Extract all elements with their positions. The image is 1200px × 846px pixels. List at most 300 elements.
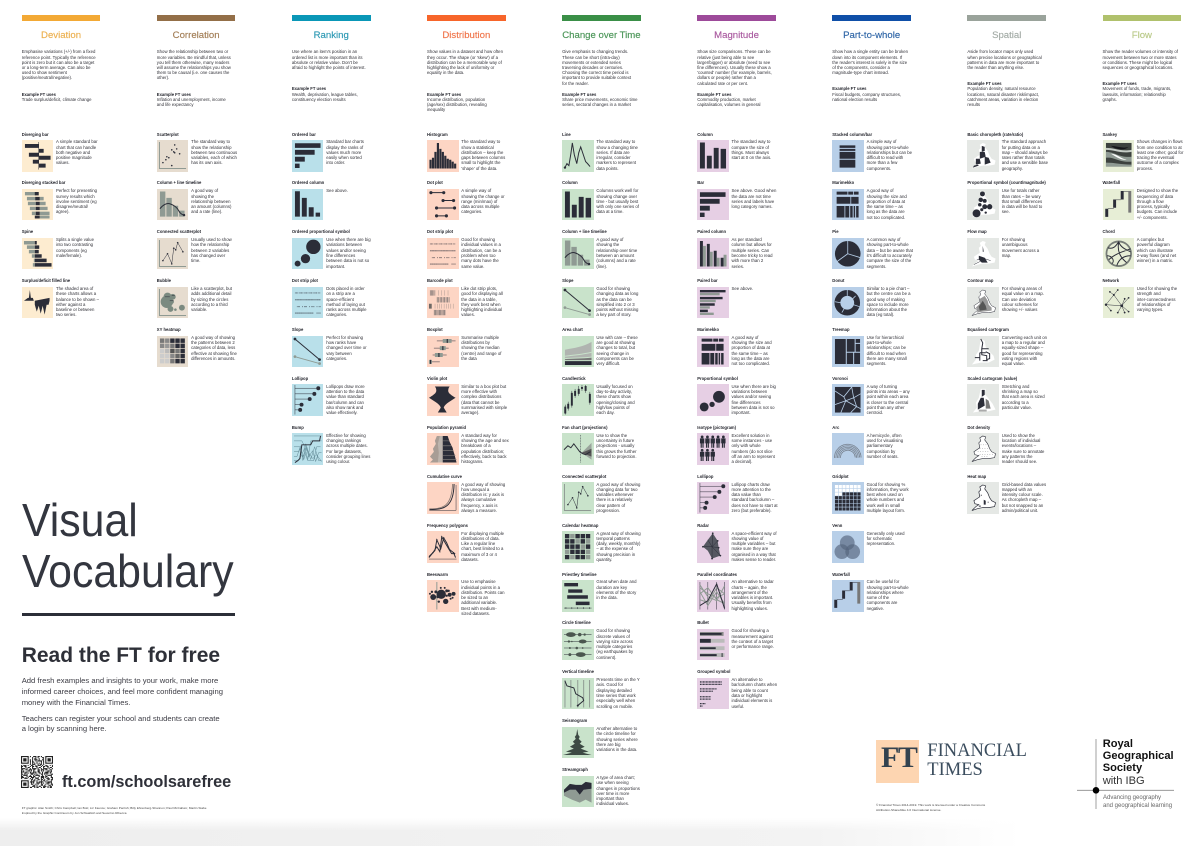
description: using colour. xyxy=(326,459,350,464)
description: Lollipop charts draw xyxy=(731,482,770,487)
intro text: larger/bigger) or absolute (need to see xyxy=(697,60,770,65)
description: outcome of a complex xyxy=(1137,160,1179,165)
description: Use to emphasise xyxy=(461,579,496,584)
description: axis. Good for xyxy=(596,682,623,687)
description: any patterns the xyxy=(1002,454,1033,459)
description: either against a xyxy=(56,302,85,307)
card: Treemap xyxy=(832,327,960,376)
description xyxy=(1137,286,1177,312)
description: map – should always be xyxy=(1002,150,1048,155)
description xyxy=(461,482,505,513)
description: between an amount xyxy=(596,253,634,258)
description: quantity. xyxy=(596,557,612,562)
example uses: Share price movements, economic time xyxy=(562,97,638,102)
card: Isotype (pictogram) xyxy=(697,425,825,474)
description xyxy=(191,286,232,312)
icon: sankey xyxy=(1102,140,1134,172)
description: into two contrasting xyxy=(56,242,93,247)
icon: calendar heatmap xyxy=(562,531,594,563)
example uses: and life expectancy xyxy=(157,102,194,107)
card: Connected scatterplot: Connected scatterplot xyxy=(562,474,606,479)
description: are good at showing xyxy=(596,340,635,345)
description: charts – again, the xyxy=(731,585,767,590)
card: Chord: Chord xyxy=(1102,229,1115,234)
card: Area chart: Area chart xyxy=(562,327,583,332)
description: variables, each of which xyxy=(191,155,237,160)
icon: vertical timeline xyxy=(562,678,594,709)
description xyxy=(461,286,503,318)
description: Good for showing a xyxy=(731,628,769,633)
description xyxy=(867,433,903,459)
description: bar/column and can xyxy=(326,400,364,405)
card: Seismogram xyxy=(562,718,690,767)
heading: Correlation: Correlation xyxy=(173,30,220,40)
description: be sized to an xyxy=(461,595,488,600)
card: Venn xyxy=(832,523,960,572)
description: Use with care – these xyxy=(596,335,638,340)
card: Cumulative curve xyxy=(427,474,555,523)
description: a map to a regular and xyxy=(1002,340,1045,345)
icon: parallel coordinates xyxy=(697,580,729,612)
intro text: ordered list is more important than its xyxy=(292,55,363,60)
copyright: Attribution-ShareAlike 4.0 International License. xyxy=(876,808,941,812)
card: Column xyxy=(697,132,825,180)
description: (centre) and range of xyxy=(461,351,501,356)
description: components. xyxy=(867,166,891,171)
description: column but allows for xyxy=(731,242,772,247)
card: Barcode plot xyxy=(427,278,555,327)
description: the circle timeline for xyxy=(596,731,636,736)
icon: diverging bar xyxy=(22,140,53,172)
description: Like a regular line xyxy=(461,541,495,546)
promo text: informed career choices, and feel more confident managing xyxy=(22,687,223,696)
icon: voronoi xyxy=(832,384,864,416)
copyright: © Financial Times 2014-2019. This work is licensed under a Creative Commons xyxy=(876,802,985,806)
description xyxy=(731,628,774,649)
intro text: will assume the relationships you show xyxy=(157,65,231,70)
description: and use a sensible base xyxy=(1002,160,1048,165)
description: uncertainty in future xyxy=(596,438,634,443)
description xyxy=(326,384,365,415)
column: Deviation xyxy=(22,15,100,318)
icon: chord xyxy=(1102,238,1134,269)
example uses xyxy=(967,81,1039,107)
description: the context of a target xyxy=(731,639,773,644)
colour bar xyxy=(427,15,506,21)
description: value than standard xyxy=(326,394,364,399)
description: showing part-to-whole xyxy=(867,145,909,150)
description: showing part-to-whole xyxy=(867,242,909,247)
intro text: Show the reader volumes or intensity of xyxy=(1102,49,1178,54)
intro text xyxy=(427,49,503,75)
description: The standard way to xyxy=(731,139,770,144)
description: part-to-whole xyxy=(867,340,892,345)
description: also show rank and xyxy=(326,405,363,410)
colour bar xyxy=(562,15,641,21)
card: Stacked column/bar xyxy=(832,132,960,180)
intro text: calculated rate or per cent. xyxy=(697,81,748,86)
icon: lollipop xyxy=(697,482,729,514)
description: A simple standard bar xyxy=(56,139,98,144)
example uses: inequality xyxy=(427,107,445,112)
description: same value. xyxy=(461,264,484,268)
chart list xyxy=(1102,132,1200,327)
card: Voronoi xyxy=(832,376,960,425)
description: more effective with xyxy=(461,389,497,394)
description: segments. xyxy=(867,361,886,366)
description: The standard way to xyxy=(596,139,635,144)
description: which can illustrate xyxy=(1137,248,1173,253)
description: parliamentary xyxy=(867,443,893,448)
description xyxy=(1002,139,1048,171)
card: Donut xyxy=(832,278,960,327)
description: categories. xyxy=(326,312,347,317)
description xyxy=(1002,335,1047,367)
description: Effective for showing xyxy=(326,433,366,438)
description: events/locations – xyxy=(1002,443,1036,448)
description: important than xyxy=(596,796,624,801)
card: Spine xyxy=(22,229,94,269)
description: mapped with an xyxy=(1002,487,1032,492)
description: that small differences xyxy=(1002,199,1042,204)
description: forward to projection. xyxy=(596,454,637,459)
example uses: Example FT uses xyxy=(427,92,461,97)
description: shrinking a map so xyxy=(1002,389,1038,394)
description: many dots have the xyxy=(461,258,499,263)
card: Population pyramid xyxy=(427,425,555,474)
card: Heat map xyxy=(967,474,1095,523)
icon: treemap xyxy=(832,336,864,367)
description xyxy=(56,188,97,214)
description xyxy=(731,139,771,160)
card: Boxplot xyxy=(427,327,555,376)
description: changes in proportions xyxy=(596,786,640,790)
description: bar/column charts when xyxy=(731,682,777,687)
description: A great way of showing xyxy=(596,531,641,536)
column: Magnitude xyxy=(697,0,825,720)
description: Summarise multiple xyxy=(461,335,499,340)
example uses: (age/sex) distribution, revealing xyxy=(427,102,487,107)
description xyxy=(56,237,94,258)
description: changed over time or xyxy=(326,345,367,350)
intro text: point is zero but it can also be a target xyxy=(22,60,94,65)
description xyxy=(461,579,505,616)
description: between data is not so xyxy=(731,405,774,410)
credits: FT graphic: Alan Smith; Chris Campbell; Ian Bott; Liz Faunce; Graham Parrish; Billy Ehrenberg-Shannon; Paul McCallum; Martin Stabe xyxy=(22,806,206,810)
description: distribution. Points can xyxy=(461,590,505,595)
description: points into areas – any xyxy=(867,389,910,394)
description: adds additional detail xyxy=(191,291,231,296)
intro text xyxy=(1102,49,1178,70)
description xyxy=(1137,237,1176,264)
description xyxy=(731,579,774,611)
description: variations between xyxy=(731,389,767,394)
card: Dot plot xyxy=(427,180,555,229)
icon: Priestley timeline xyxy=(562,580,594,612)
chart list xyxy=(967,132,1095,523)
description: information, they work xyxy=(867,487,909,492)
description: method of laying out xyxy=(326,302,365,307)
description: from one condition to at xyxy=(1137,145,1182,150)
promo text: money with the Financial Times. xyxy=(22,698,130,707)
description: in data will be hard to xyxy=(1002,204,1042,209)
description: how the relationship xyxy=(191,242,229,247)
description: values much more xyxy=(326,150,361,155)
wordmark xyxy=(927,742,1027,780)
description: See above. xyxy=(326,188,348,193)
card: Paired bar: Paired bar xyxy=(697,278,718,283)
description: relationship between xyxy=(191,199,231,204)
description: A type of area chart; xyxy=(596,775,635,780)
card: Slope: Slope xyxy=(562,278,574,283)
card: Spine: Spine xyxy=(22,229,33,234)
description: A space-efficient way of xyxy=(731,531,777,536)
description: See above. xyxy=(731,286,753,291)
description xyxy=(731,335,772,367)
description: things. Must always xyxy=(731,150,769,155)
description: as the data can be xyxy=(596,297,632,302)
description: Good for showing xyxy=(596,628,630,633)
icon: column xyxy=(697,140,729,172)
card: Heat map: Heat map xyxy=(967,474,986,479)
icon: slope xyxy=(292,336,323,367)
intro text: movements or extended series xyxy=(562,60,621,65)
icon: equalised cartogram xyxy=(967,336,999,367)
description: multiple variables – but xyxy=(731,541,775,546)
description: range (min/max) of xyxy=(461,199,497,204)
description: show a changing time xyxy=(596,145,638,150)
description: multiple series. Can xyxy=(731,248,769,253)
description: Perfect for presenting xyxy=(56,188,97,193)
card: Line xyxy=(562,132,690,180)
description: between 2 variables xyxy=(191,248,229,253)
example uses: catchment areas, variation in election xyxy=(967,97,1038,102)
description: point than any other xyxy=(867,405,905,410)
card: Basic choropleth: Basic choropleth (rate/ratio) xyxy=(967,132,1023,136)
description: movement across a xyxy=(1002,248,1039,253)
description xyxy=(731,384,776,415)
card: Network xyxy=(1102,278,1200,327)
wordmark: FINANCIAL xyxy=(927,741,1027,761)
society name: with IBG xyxy=(1103,775,1145,787)
description: variables whenever xyxy=(596,492,633,497)
description xyxy=(596,726,638,752)
intro text: Show size comparisons. These can be xyxy=(697,49,771,54)
description: variations in the data. xyxy=(596,747,637,752)
crosshair xyxy=(1077,739,1177,809)
colour bar xyxy=(832,15,911,21)
intro text: the reader's interest is solely in the size xyxy=(832,60,907,65)
card: Diverging bar: Diverging bar xyxy=(22,132,49,136)
description: day-to-day activity, xyxy=(596,389,632,394)
description: distributions of data. xyxy=(461,536,500,541)
description: showing change over xyxy=(596,194,637,199)
example uses xyxy=(832,86,901,102)
description xyxy=(867,139,912,171)
description: A simple way of xyxy=(867,139,896,144)
column: Flow xyxy=(1102,0,1200,330)
description: A good way of xyxy=(596,237,623,242)
intro text: Emphasise variations (+/-) from a fixed xyxy=(22,49,95,54)
description: Dots placed in order xyxy=(326,286,365,291)
description: individual values in a xyxy=(461,242,501,247)
description: An alternative to radar xyxy=(731,579,774,584)
wordmark: TIMES xyxy=(927,760,983,780)
description: showing part-to-whole xyxy=(867,585,909,590)
card: Dot strip plot: Dot strip plot xyxy=(292,278,318,283)
description: showing the size and xyxy=(867,194,907,199)
description: Good for showing % xyxy=(867,482,905,487)
description xyxy=(731,188,776,209)
description: A simple way of xyxy=(461,188,491,193)
card: Ordered bar: Ordered bar xyxy=(292,132,316,136)
credits: Inspired by the Graphic Continuum by Jon Schwabish and Severino Ribecca xyxy=(22,811,126,815)
card: Chord xyxy=(1102,229,1200,278)
column: Ranking xyxy=(292,15,371,465)
icon: column and line xyxy=(157,189,188,220)
description xyxy=(326,335,367,361)
description xyxy=(1137,188,1178,220)
description xyxy=(596,335,638,367)
description: easily when sorted xyxy=(326,155,362,160)
intro text: Show the relationship between two or xyxy=(157,49,228,54)
description: not too complicated. xyxy=(867,215,905,220)
description xyxy=(596,628,633,660)
description: Generally only used xyxy=(867,531,905,536)
intro text: distribution can be a memorable way of xyxy=(427,60,502,65)
description: See above. Good when xyxy=(731,188,776,193)
title: Visual Vocabulary xyxy=(22,494,233,596)
card: Waterfall xyxy=(1102,180,1200,229)
description: representation. xyxy=(867,541,895,546)
intro text: (positive/neutral/negative). xyxy=(22,75,72,80)
card: Sankey: Sankey xyxy=(1102,132,1117,136)
description: complex distributions xyxy=(461,394,501,399)
description: additional variable. xyxy=(461,600,497,605)
description: multiple layout form. xyxy=(867,508,905,513)
description: data or highlight xyxy=(731,693,762,698)
description: location of individual xyxy=(1002,438,1040,443)
description: makes sense to reader. xyxy=(731,557,776,562)
description: become tricky to read xyxy=(731,253,773,258)
description: – at the expense of xyxy=(596,546,633,551)
description: Designed to show the xyxy=(1137,188,1178,193)
card: Radar: Radar xyxy=(697,523,709,528)
description xyxy=(867,384,910,415)
description: unambiguous xyxy=(1002,242,1028,247)
description: between data is not so xyxy=(326,258,369,263)
intro text: them to be causal (i.e. one causes the xyxy=(157,70,229,75)
icon: Venn diagram xyxy=(832,531,864,563)
description: chart that can handle xyxy=(56,145,96,150)
description: has changed over xyxy=(191,253,225,258)
description: For showing xyxy=(1002,237,1025,242)
card: Dot strip plot xyxy=(292,278,367,318)
example uses: Wealth, deprivation, league tables, xyxy=(292,92,358,97)
chart list xyxy=(22,132,99,318)
card: Flow map: Flow map xyxy=(967,229,987,234)
card: Cumulative curve: Cumulative curve xyxy=(427,474,462,479)
description: simplified into 2 or 3 xyxy=(596,302,635,307)
description: space-efficient xyxy=(326,297,354,302)
description: make sure to annotate xyxy=(1002,449,1044,454)
example uses: Example FT uses xyxy=(562,92,596,97)
description xyxy=(191,188,232,214)
chart list xyxy=(832,132,960,620)
heading: Part-to-whole: Part-to-whole xyxy=(843,30,900,40)
description xyxy=(867,579,909,611)
description: good way of making xyxy=(867,297,905,302)
society name: Geographical xyxy=(1103,750,1174,762)
description: Usually benefits from xyxy=(731,600,772,605)
description: attention to the data xyxy=(326,389,364,394)
card: Scatterplot xyxy=(156,132,237,172)
card: Bullet: Bullet xyxy=(697,620,709,625)
card: Ordered proportional symbol xyxy=(292,229,371,269)
strapline: and geographical learning xyxy=(1103,803,1172,809)
column: Correlation xyxy=(156,15,237,367)
description: temporal patterns xyxy=(596,536,630,541)
description: display the ranks of xyxy=(326,145,363,150)
description: according to a xyxy=(1002,400,1029,405)
card: Bump: Bump xyxy=(292,425,304,430)
description: As per standard xyxy=(731,237,762,242)
card: Paired column: Paired column xyxy=(697,229,726,234)
intro text: down into its component elements. If xyxy=(832,55,902,60)
description: being able to count xyxy=(731,688,768,693)
example uses xyxy=(292,86,358,102)
description: highlighting values. xyxy=(731,606,768,611)
card: Diverging bar xyxy=(22,132,98,172)
description: whole numbers and xyxy=(867,497,904,502)
Royal Geographical Society logo xyxy=(1077,739,1177,809)
description: Can be useful for xyxy=(867,579,899,584)
description: is closer to the central xyxy=(867,400,908,405)
icon: area chart xyxy=(562,336,594,367)
description: clear pattern of xyxy=(596,503,625,508)
promo text xyxy=(22,676,223,708)
description: equal value. xyxy=(1002,361,1025,366)
description xyxy=(191,335,237,361)
description: more attention to the xyxy=(731,487,771,492)
card: Slope: Slope xyxy=(292,327,303,332)
description: important. xyxy=(731,410,751,415)
card: Histogram: Histogram xyxy=(427,132,448,136)
icon: spine xyxy=(22,238,53,269)
description: average). xyxy=(461,410,479,415)
description: problem when too xyxy=(461,253,495,258)
description: long category names. xyxy=(731,204,773,209)
intro text: highlighting the lack of uniformity or xyxy=(427,65,494,70)
description: by sizing the circles xyxy=(191,297,228,302)
description: two series. xyxy=(56,312,77,317)
chart list xyxy=(427,132,555,620)
icon: contour map xyxy=(967,287,999,318)
example uses: Trade surplus/deficit, climate change xyxy=(22,97,92,102)
description: there are big xyxy=(596,742,621,747)
description: both negative and xyxy=(56,150,90,155)
description: important. xyxy=(326,264,345,268)
icon: surplus deficit filled line xyxy=(22,287,53,318)
icon: frequency polygons xyxy=(427,531,458,563)
description: A complex but xyxy=(1137,237,1164,242)
card: Ordered proportional symbol: Ordered proportional symbol xyxy=(292,229,350,234)
description: survey results which xyxy=(56,194,95,199)
card: Histogram xyxy=(427,132,555,180)
card: Calendar heatmap: Calendar heatmap xyxy=(562,523,598,528)
icon: bubble xyxy=(157,287,188,318)
card: Proportional symbol xyxy=(697,376,825,425)
